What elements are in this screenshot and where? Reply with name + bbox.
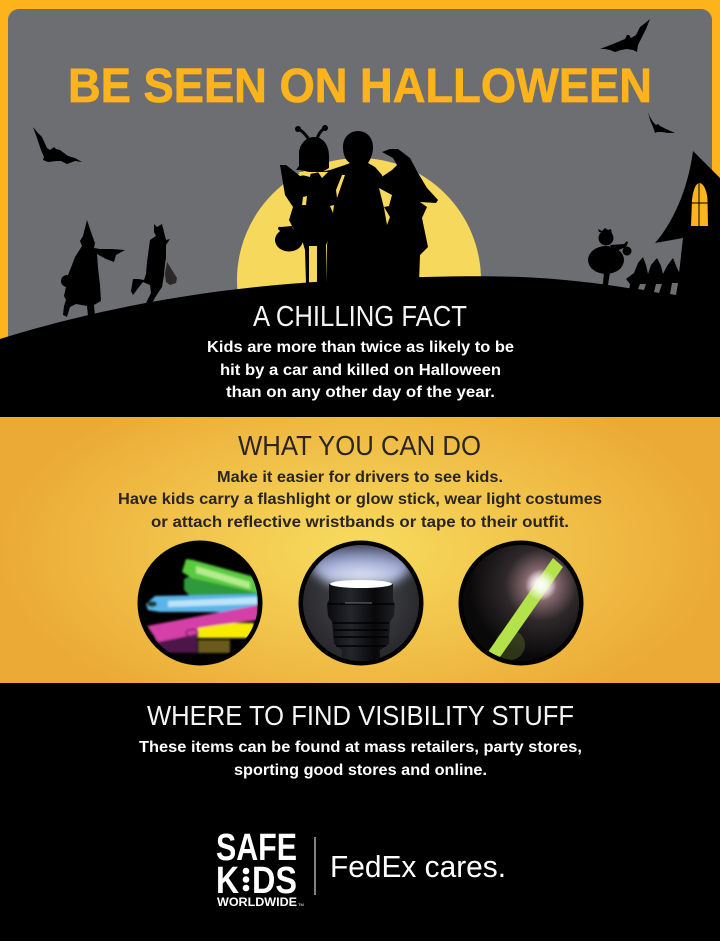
icon: small bat right — [648, 112, 675, 133]
icon: glowing wristband photo — [458, 540, 584, 666]
logo text: FedEx cares: FedEx cares. — [330, 849, 506, 884]
logo: Safe Kids Worldwide: DS — [252, 860, 297, 902]
icon: lit window — [691, 183, 708, 226]
icon: flashlight photo — [298, 540, 424, 666]
icon: bat left — [33, 127, 82, 164]
silhouette: tall child in centre — [326, 131, 392, 283]
heading: where to find visibility stuff: WHERE TO FIND VISIBILITY STUFF — [147, 700, 574, 731]
silhouette: child in pumpkin costume — [588, 228, 632, 287]
hero scene background frame — [0, 0, 720, 349]
text block: retailers: sporting good stores and online. — [234, 762, 487, 779]
title: BE SEEN ON HALLOWEEN — [68, 60, 652, 113]
divider — [314, 837, 316, 895]
text block: chilling fact: than on any other day of the year. — [226, 384, 495, 401]
text block: advice: Have kids carry a flashlight or glow stick, wear light costumes — [118, 491, 602, 508]
text block: retailers — [139, 739, 582, 779]
logo: Safe Kids Worldwide: K — [216, 860, 239, 902]
icon: glow sticks photo — [138, 540, 262, 666]
panel: what you can do — [0, 417, 720, 683]
moon — [237, 158, 481, 402]
house and fence — [626, 151, 720, 300]
text block: advice: or attach reflective wristbands or tape to their outfit. — [151, 514, 569, 531]
logo: Safe Kids Worldwide: WORLDWIDE — [217, 895, 297, 909]
text block: advice: Make it easier for drivers to see kids. — [217, 469, 503, 486]
logo: Safe Kids Worldwide — [216, 827, 304, 909]
silhouette: witch child pointing — [61, 220, 125, 317]
silhouette: running child with bag — [131, 224, 177, 303]
icon: bat top right — [600, 19, 650, 52]
panel: where to find — [0, 683, 720, 941]
silhouette: witch child — [380, 149, 438, 283]
hill — [0, 276, 720, 418]
text block: chilling fact: Kids are more than twice as likely to be — [207, 339, 514, 356]
heading: what you can do: WHAT YOU CAN DO — [238, 430, 481, 461]
heading: a chilling fact: A CHILLING FACT — [253, 301, 467, 333]
logo: Safe Kids Worldwide: TM — [298, 902, 304, 907]
text block: chilling fact: hit by a car and killed on Halloween — [220, 362, 501, 379]
silhouette: fairy child with bucket — [275, 125, 346, 283]
moon gaps between children — [298, 172, 392, 290]
text block: retailers: These items can be found at mass retailers, party stores, — [139, 739, 582, 756]
logo: Safe Kids Worldwide: SAFE — [216, 827, 297, 869]
text block: chilling fact — [207, 339, 514, 401]
text block: advice — [118, 469, 602, 531]
